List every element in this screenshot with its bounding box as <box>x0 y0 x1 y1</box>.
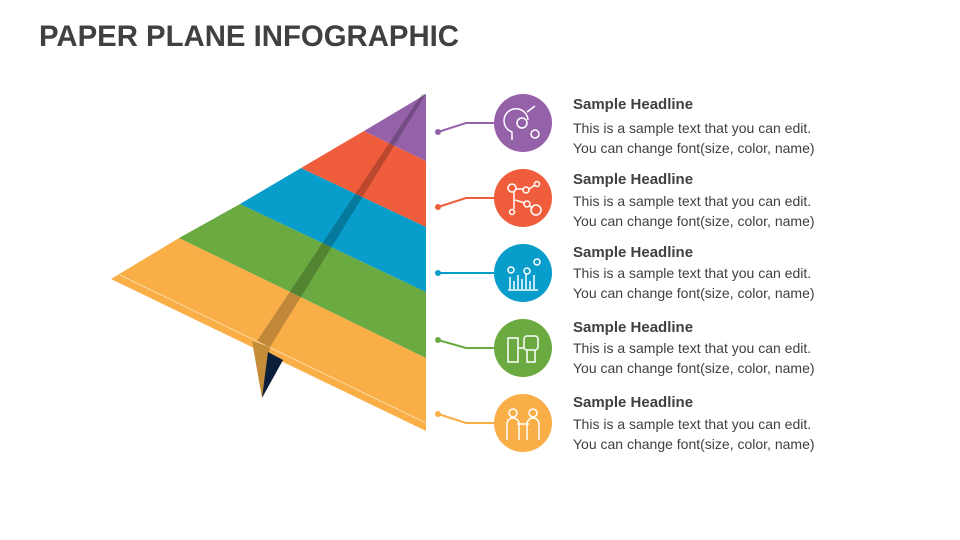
item 1 <box>435 94 815 156</box>
title: PAPER PLANE INFOGRAPHIC <box>39 20 459 53</box>
text: Sample Headline <box>573 319 693 336</box>
item 2: This is a sample text that you can edit. <box>573 193 811 209</box>
connector <box>438 272 495 274</box>
icon: network <box>494 169 552 227</box>
keel <box>252 341 270 398</box>
paper plane <box>111 94 426 431</box>
icon: robot <box>494 319 552 377</box>
item 1: You can change font(size, color, name) <box>573 140 815 156</box>
crease <box>257 94 426 347</box>
item 2: You can change font(size, color, name) <box>573 213 815 229</box>
item 4: This is a sample text that you can edit. <box>573 340 811 356</box>
icon: gear head <box>494 94 552 152</box>
band: blue <box>240 168 426 292</box>
band: orange <box>111 238 426 431</box>
band: green <box>179 204 426 358</box>
item 5: You can change font(size, color, name) <box>573 436 815 452</box>
icon: chart <box>494 244 552 302</box>
item 5: This is a sample text that you can edit. <box>573 416 811 432</box>
item 3: You can change font(size, color, name) <box>573 285 815 301</box>
text: Sample Headline <box>573 244 693 261</box>
text: Sample Headline <box>573 394 693 411</box>
item 1: This is a sample text that you can edit. <box>573 120 811 136</box>
item 4: You can change font(size, color, name) <box>573 360 815 376</box>
item 3: This is a sample text that you can edit. <box>573 265 811 281</box>
connector <box>438 123 495 132</box>
band: red <box>301 131 426 227</box>
text: Sample Headline <box>573 171 693 188</box>
item 4 <box>435 319 815 377</box>
item 2 <box>435 169 815 229</box>
item 3 <box>435 244 815 302</box>
connector <box>438 414 495 423</box>
connector <box>438 340 495 348</box>
icon: people <box>494 394 552 452</box>
band: purple <box>364 94 426 161</box>
text: Sample Headline <box>573 96 693 113</box>
connector <box>438 198 495 207</box>
item 5 <box>435 394 815 452</box>
